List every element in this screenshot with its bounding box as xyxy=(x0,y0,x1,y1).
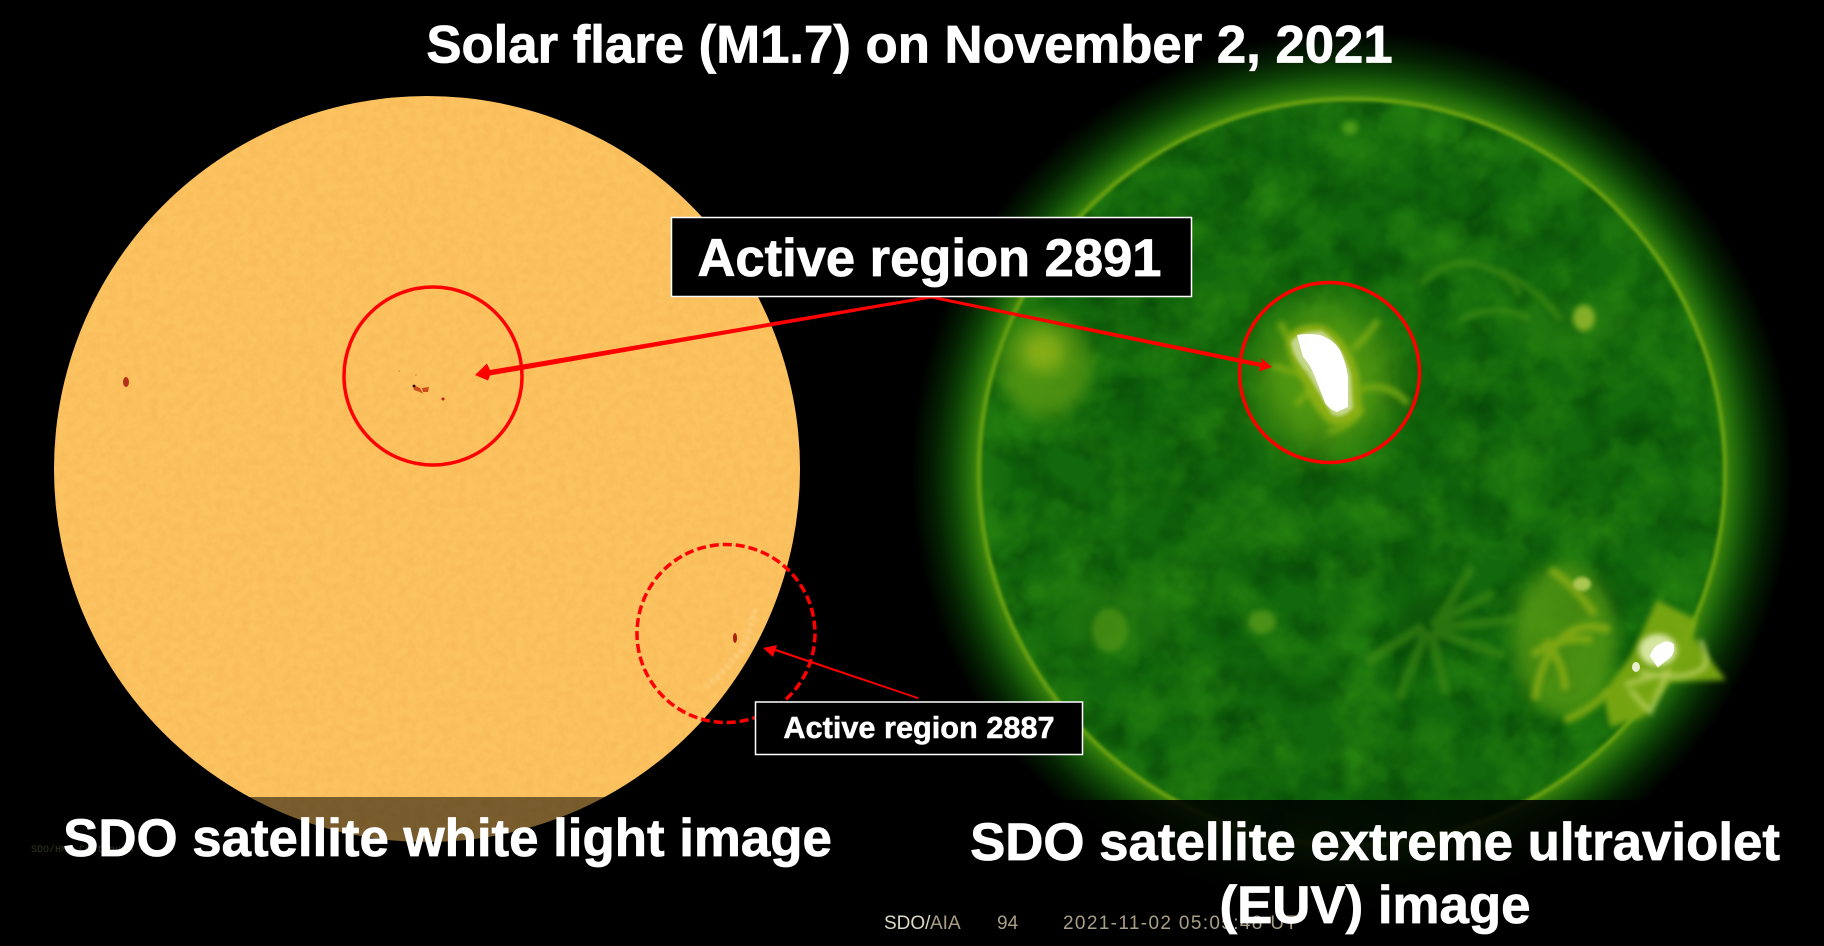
label: active region 2887: Active region 2887 xyxy=(783,710,1055,745)
olive halo around flare core xyxy=(1286,325,1362,426)
title: Solar flare (M1.7) on November 2, 2021 xyxy=(426,16,1393,74)
circle: active region 2891 on EUV image xyxy=(1240,282,1420,462)
solar disc xyxy=(54,96,800,842)
disc granulation xyxy=(54,96,800,842)
dashed circle: active region 2887 xyxy=(637,544,815,722)
panel: SDO white light sun image xyxy=(54,96,800,842)
bright region at lower right limb xyxy=(1603,600,1726,727)
sunspots of region 2891 xyxy=(398,370,444,400)
caption: white light image: SDO satellite white light image xyxy=(63,809,832,868)
flare core xyxy=(1297,334,1348,412)
flaring active region 2891 xyxy=(1255,304,1408,452)
arrow: to region 2891 on white light image xyxy=(475,296,931,380)
bright solar limb xyxy=(979,99,1725,845)
source label for EUV image: AIA xyxy=(930,913,961,934)
disc mottling xyxy=(980,100,1724,844)
circle: active region 2891 on white light image xyxy=(344,287,522,465)
label: active region 2887 xyxy=(756,702,1082,754)
label: active region 2891 xyxy=(672,218,1192,296)
white flare kernels xyxy=(1651,642,1673,666)
sunspot far left xyxy=(123,377,129,387)
small faint source label for white light image: SDO/HMI Continuum xyxy=(31,844,133,856)
label: active region 2891: Active region 2891 xyxy=(698,229,1161,288)
radial plume rosette xyxy=(1370,570,1510,695)
corona glow and disc xyxy=(902,22,1802,922)
arrow: to region 2887 xyxy=(763,645,919,699)
caption: extreme ultraviolet image: SDO satellite extreme ultraviolet xyxy=(970,813,1780,872)
coronal structures xyxy=(999,121,1635,720)
sunspot and faculae of region 2887 xyxy=(707,610,754,686)
panel: SDO extreme ultraviolet sun image xyxy=(918,37,1787,870)
caption: extreme ultraviolet image: (EUV) image xyxy=(1220,876,1530,935)
lower right loop system xyxy=(1513,564,1617,716)
caption backdrop bands xyxy=(0,797,1824,946)
source label for EUV image: SDO/ xyxy=(884,913,931,934)
source label for EUV image: 2021-11-02 05:05:48 UT xyxy=(1063,913,1297,934)
arrow: to region 2891 on EUV image xyxy=(931,296,1272,372)
source label for EUV image: 94 xyxy=(997,913,1019,934)
